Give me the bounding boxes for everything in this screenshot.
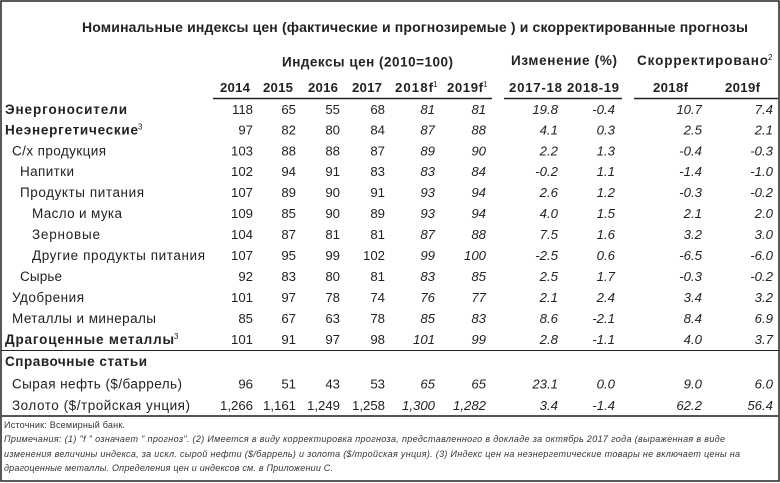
row: raw materials: 81 [370,269,385,284]
row: other food: 102 [363,248,385,263]
row: energy: 19.8 [532,102,559,117]
row: precious metals: 3.7 [755,332,774,347]
row: precious metals: 98 [370,332,385,347]
row: oils and meals: 85 [281,206,296,221]
row: precious metals: 99 [471,332,487,347]
row: crude oil: 96 [238,376,253,392]
row: food: 91 [370,185,385,200]
row: oils and meals: 94 [471,206,486,221]
row: raw materials: 92 [238,269,253,284]
row: raw materials [20,269,774,284]
row: grains: 88 [471,227,487,242]
column headers: 1 [483,80,488,89]
row: beverages: -1.4 [679,164,702,179]
row: beverages: -1.0 [750,164,774,179]
row: crude oil: 23.1 [531,376,558,392]
row: agriculture: С/х продукция [12,144,106,158]
row: beverages: 1.1 [597,164,615,179]
row: agriculture: -0.3 [750,144,774,158]
row: other food: 99 [420,248,436,263]
row: fertilizers: 101 [231,290,253,305]
row: metals and minerals: 67 [281,311,296,326]
row: food: 90 [325,185,340,200]
source and notes: изменения величины индекса, за искл. сырой нефти ($/баррель) и золота ($/тройская унция). (3) Индекс цен на неэнергетические товары не включает цены на [4,449,740,459]
row: raw materials: 85 [471,269,487,284]
row: energy: 81 [471,102,486,117]
row: energy: Энергоносители [5,102,127,117]
row: gold: 3.4 [540,398,558,413]
row: gold: -1.4 [592,398,615,413]
row: fertilizers: 97 [281,290,296,305]
row: beverages: 91 [325,164,340,179]
row: grains: 1.6 [597,227,616,242]
row: food: 94 [471,185,486,200]
row: other food: 0.6 [597,248,616,263]
row: grains: 7.5 [540,227,559,242]
row: energy: 55 [325,102,340,117]
row: oils and meals: 90 [325,206,340,221]
row: fertilizers: 77 [471,290,487,305]
row: grains: 87 [420,227,436,242]
row: raw materials: 2.5 [539,269,559,284]
row: gold [12,398,773,413]
row: other food: 99 [325,248,340,263]
column headers: 2018-19 [567,80,619,95]
row: non-energy: 88 [471,122,487,138]
row: fertilizers: 2.1 [539,290,558,305]
row: beverages [20,164,774,179]
row: raw materials: 1.7 [597,269,616,284]
row: food: Продукты питания [20,185,144,200]
row: crude oil: 6.0 [755,376,774,392]
row: beverages: -0.2 [535,164,559,179]
row: beverages: 84 [471,164,486,179]
row: energy: 68 [370,102,385,117]
row: crude oil: 43 [325,376,340,392]
row: raw materials: Сырье [20,269,62,284]
row: agriculture: 88 [325,144,340,158]
row: gold: 1,161 [263,398,296,413]
source and notes: драгоценные металлы. Определения цен и индексов см. в Приложении С. [4,463,333,473]
row: gold: 1,300 [402,398,436,413]
column headers: 1 [433,80,438,89]
title: Номинальные индексы цен (фактические и прогнозиремые ) и скорректированные прогнозы [82,19,748,35]
row: other food: 100 [464,248,487,263]
row: metals and minerals: -2.1 [592,311,615,326]
row: fertilizers: Удобрения [12,290,84,305]
row: non-energy: 87 [420,122,436,138]
row: crude oil: 65 [420,376,436,392]
row: energy: 7.4 [755,102,773,117]
row: agriculture [12,144,774,158]
row: crude oil: 0.0 [597,376,616,392]
row: non-energy: 3 [138,122,143,132]
row: non-energy: 80 [325,122,340,138]
column headers: 2016 [308,80,338,95]
row: oils and meals [32,206,774,221]
row: metals and minerals [12,311,774,326]
row: other food: -6.5 [679,248,703,263]
row: raw materials: 80 [325,269,340,284]
group headers [282,53,773,70]
row: crude oil [12,376,774,392]
row: energy: 81 [420,102,435,117]
row: food: 1.2 [597,185,616,200]
row: energy: 118 [232,102,253,117]
row: precious metals: 101 [413,332,435,347]
row: agriculture: -0.4 [679,144,702,158]
row: beverages: Напитки [20,164,74,179]
row: non-energy: 4.1 [540,122,558,138]
column headers: 2014 [220,80,251,95]
row: food: 2.6 [539,185,559,200]
row: fertilizers: 78 [325,290,340,305]
row: metals and minerals: 6.9 [755,311,774,326]
row: oils and meals: 93 [420,206,436,221]
row: metals and minerals: Металлы и минералы [12,311,156,326]
group headers: Скорректировано [637,53,768,68]
row: non-energy: 84 [370,122,385,138]
row: other food: 95 [281,248,296,263]
group headers: 2 [768,53,773,62]
row: crude oil: 9.0 [684,376,703,392]
row: other food: -2.5 [535,248,559,263]
row: grains: 87 [281,227,296,242]
row: metals and minerals: 83 [471,311,487,326]
row: precious metals: 3 [174,332,179,341]
row: fertilizers: 74 [370,290,385,305]
row: food: 93 [420,185,436,200]
row: fertilizers: 3.2 [755,290,774,305]
column headers: 2017 [352,80,382,95]
row: metals and minerals: 8.4 [684,311,702,326]
row: gold: 1,258 [352,398,385,413]
row: fertilizers: 76 [420,290,436,305]
row: agriculture: 89 [420,144,436,158]
column headers: 2018f [395,80,434,95]
source and notes: Примечания: (1) "f " означает " прогноз". (2) Имеется в виду корректировка прогноза, представленного в докладе за октябрь 2017 года (выраженная в виде [4,434,725,444]
row: gold: 1,249 [307,398,340,413]
row: crude oil: Сырая нефть ($/баррель) [12,376,182,392]
row: fertilizers: 3.4 [684,290,702,305]
row: food: 107 [231,185,253,200]
row: food: -0.2 [750,185,774,200]
row: agriculture: 2.2 [539,144,559,158]
row: non-energy: 97 [238,122,253,138]
row: oils and meals: 2.1 [683,206,702,221]
column headers: 2019f [447,80,484,95]
row: gold: 1,266 [220,398,253,413]
row: precious metals: 101 [231,332,253,347]
row: raw materials: -0.2 [750,269,774,284]
row: metals and minerals: 78 [370,311,385,326]
row: grains: Зерновые [32,227,100,242]
row: other food: -6.0 [750,248,774,263]
row: precious metals: 97 [325,332,340,347]
column headers: 2018f [653,80,689,95]
row: precious metals: -1.1 [592,332,615,347]
row: oils and meals: 4.0 [540,206,559,221]
row: crude oil: 51 [281,376,296,392]
row: non-energy: 0.3 [597,122,616,138]
row: energy [5,102,773,117]
row: raw materials: 83 [420,269,436,284]
row: non-energy: 82 [281,122,296,138]
row: non-energy [5,122,773,138]
row: grains: 3.2 [684,227,703,242]
row: food: 89 [281,185,296,200]
row: oils and meals: 89 [370,206,385,221]
row: gold: 62.2 [676,398,703,413]
source and notes [4,420,740,473]
row: other food: 107 [231,248,253,263]
row: precious metals: Драгоценные металлы [5,332,174,347]
row: energy: 10.7 [676,102,703,117]
row: beverages: 83 [420,164,436,179]
row: agriculture: 103 [231,144,253,158]
row: energy: 65 [281,102,296,117]
row: precious metals: 4.0 [684,332,703,347]
column headers: 2019f [725,80,761,95]
row: gold: 56.4 [747,398,773,413]
row: agriculture: 1.3 [597,144,616,158]
row: food [20,185,774,200]
row: fertilizers [12,290,774,305]
row: oils and meals: Масло и мука [32,206,122,221]
row: food: -0.3 [679,185,703,200]
row: beverages: 102 [231,164,253,179]
column headers: 2015 [263,80,293,95]
row: grains [32,227,774,242]
source and notes: Источник: Всемирный банк. [4,420,125,430]
row: grains: 104 [231,227,253,242]
row: crude oil: 53 [370,376,385,392]
group headers: Изменение (%) [511,53,617,68]
row: beverages: 83 [370,164,385,179]
row: precious metals: 91 [281,332,296,347]
row: raw materials: 83 [281,269,296,284]
row: precious metals [5,332,774,347]
column headers: 2017-18 [509,80,562,95]
row: oils and meals: 2.0 [754,206,774,221]
row: non-energy: 2.1 [754,122,773,138]
row: beverages: 94 [281,164,296,179]
row: raw materials: -0.3 [679,269,703,284]
row: agriculture: 90 [471,144,487,158]
row: grains: 81 [370,227,385,242]
row: metals and minerals: 85 [238,311,253,326]
row: agriculture: 88 [281,144,296,158]
row: oils and meals: 1.5 [597,206,616,221]
row: other food [32,248,774,263]
row: grains: 81 [325,227,340,242]
row: fertilizers: 2.4 [596,290,615,305]
group headers: Индексы цен (2010=100) [282,54,453,70]
row: agriculture: 87 [370,144,385,158]
row: grains: 3.0 [755,227,774,242]
row: metals and minerals: 85 [420,311,436,326]
row: precious metals: 2.8 [539,332,559,347]
row: metals and minerals: 8.6 [540,311,559,326]
row: metals and minerals: 63 [325,311,340,326]
row: other food: Другие продукты питания [32,248,205,263]
column headers [220,80,761,95]
row: gold: Золото ($/тройская унция) [12,398,190,413]
row: non-energy: Неэнергетические [5,122,138,138]
row: crude oil: 65 [471,376,487,392]
row: energy: -0.4 [592,102,615,117]
row: oils and meals: 109 [231,206,253,221]
row: gold: 1,282 [453,398,487,413]
section heading: memo items: Справочные статьи [5,354,147,369]
row: non-energy: 2.5 [683,122,703,138]
